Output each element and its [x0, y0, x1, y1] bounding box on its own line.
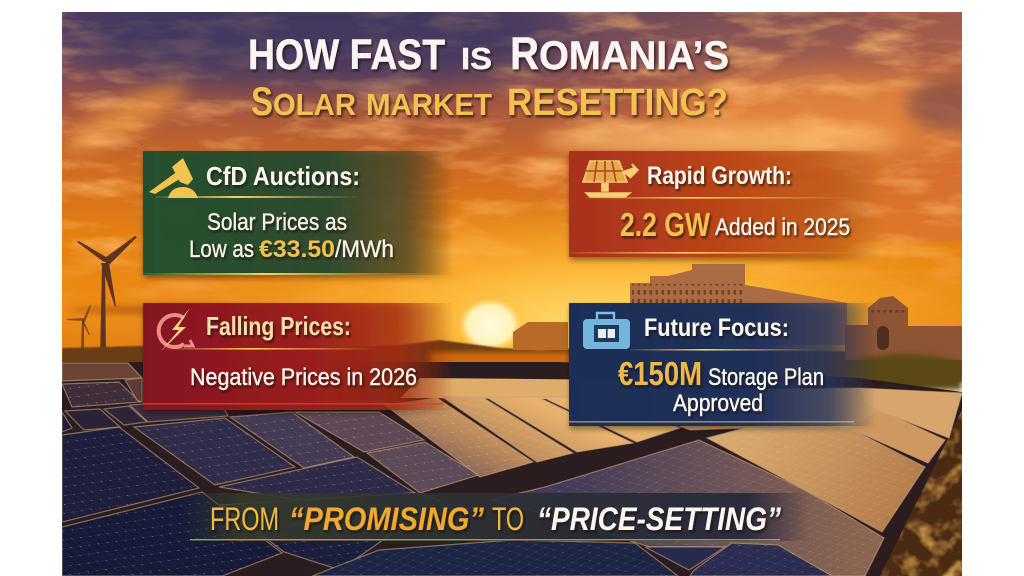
text: storage plan: Storage Plan	[708, 364, 824, 391]
wind turbines	[67, 236, 137, 360]
panel: rapid growth	[569, 151, 881, 257]
panel: CfD auctions	[143, 151, 453, 275]
title line 2: S	[251, 80, 273, 124]
panel: falling prices	[143, 303, 453, 410]
text: 2.2 GW added: Added in 2025	[715, 214, 850, 241]
icon: lightning with falling arrow	[159, 308, 193, 351]
sun	[460, 299, 520, 348]
text: storage plan: €150M	[618, 355, 702, 392]
text: solar prices: /MWh	[335, 236, 394, 263]
text: solar prices: Solar Prices as	[207, 209, 347, 236]
text: solar prices: Low as	[189, 236, 254, 263]
tagline: TO	[492, 501, 524, 537]
text: 2.2 GW added: 2.2 GW	[620, 206, 711, 243]
title line 2: RESETTING?	[507, 82, 728, 124]
solar panel field	[62, 362, 962, 576]
text: 2.2 GW added	[620, 206, 850, 243]
text: negative prices: Negative Prices in 2026	[190, 364, 417, 391]
bottom banner	[180, 493, 810, 541]
heading: Future Focus: Future Focus:	[644, 314, 789, 342]
grass verge	[880, 410, 962, 576]
text: solar prices	[189, 209, 394, 263]
heading: Falling Prices: Falling Prices:	[206, 311, 351, 341]
heading: Rapid Growth: Rapid Growth:	[647, 162, 792, 190]
heading: CfD Auctions: CfD Auctions:	[206, 161, 360, 191]
tagline	[210, 501, 781, 537]
panel: future focus	[569, 303, 875, 426]
text: storage plan: Approved	[673, 390, 763, 417]
icon: battery toolbox	[583, 313, 630, 349]
tagline: FROM	[210, 501, 279, 537]
tagline: “PROMISING”	[289, 501, 484, 537]
parliament palace silhouette	[513, 264, 965, 386]
horizon tree line	[62, 340, 962, 390]
text: solar prices: €33.50	[259, 236, 335, 263]
tagline: “PRICE-SETTING”	[537, 501, 781, 537]
icon: solar panel with arrow	[583, 161, 638, 197]
title	[248, 28, 729, 124]
title line 1: OMANIA’S	[539, 34, 729, 78]
title line 1	[248, 28, 729, 79]
title line 2	[251, 80, 728, 124]
text: storage plan	[618, 355, 824, 417]
title line 2: MARKET	[366, 87, 492, 122]
title line 1: R	[510, 28, 539, 79]
sunset sky	[55, 0, 1000, 372]
title line 1: IS	[461, 41, 492, 76]
icon: gavel	[149, 158, 198, 198]
title line 1: HOW FAST	[248, 31, 445, 79]
title line 2: OLAR	[273, 87, 356, 122]
